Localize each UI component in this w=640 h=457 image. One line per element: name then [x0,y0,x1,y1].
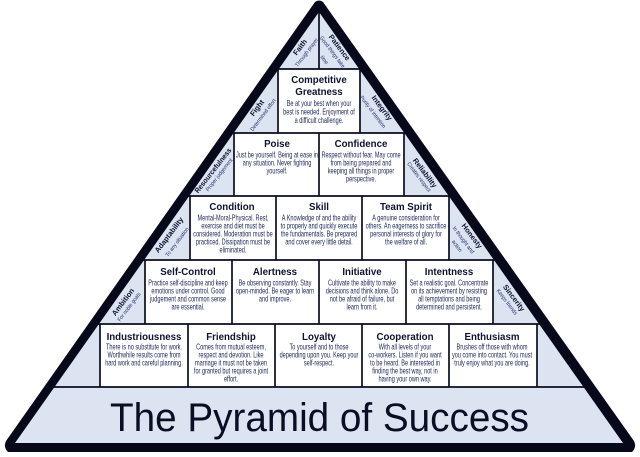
block: Team Spirit: the welfare of all. [385,239,427,247]
block grid lines [50,8,588,387]
block: Friendship: effort. [224,376,238,384]
block: Initiative: decisions and think alone. Do [326,288,399,296]
block: Poise: any situation. Never fighting [243,160,311,168]
block: Cooperation: With all levels of your [379,344,432,352]
block: Confidence: Confidence [335,139,388,150]
block: Condition: Condition [209,202,255,213]
block: Confidence [321,139,401,184]
block: Enthusiasm [452,332,532,368]
side block: Adaptability: Adaptability [153,215,186,254]
block: Cooperation: Cooperation [376,332,434,343]
side block: Resourcefulness: Proper judgement [205,157,235,193]
side block: Fight: Determined effort [249,98,278,133]
white block panels [100,69,537,387]
block: Competitive Greatness: Be at your best when your [287,100,352,108]
block: Loyalty: To yourself and to those [289,344,349,352]
side block: Ambition: Ambition [110,286,137,317]
block: Industriousness: hard work and careful planning. [105,360,183,368]
block: Loyalty: depending upon you. Keep your [280,352,359,360]
block: Intentness: determined and persistent. [416,304,482,312]
side block: Sincerity: Keeps friends [495,288,518,317]
block: Friendship: Comes from mutual esteem, [196,344,266,352]
side block: Fight: Fight [248,98,266,118]
block: Team Spirit: A genuine consideration for [372,215,440,223]
block: Competitive Greatness: best is needed. Enjoyment of [283,109,355,117]
side block: Honesty [450,222,485,255]
block: Team Spirit: Team Spirit [380,202,433,213]
side block: Patience: time [318,55,329,66]
block: Industriousness: Worthwhile results come from [107,352,181,360]
block: Condition: exercise and diet must be [201,223,265,231]
block: Competitive Greatness: a difficult challenge. [295,117,343,125]
side block: Sincerity: Sincerity [501,283,528,314]
block: Friendship: Friendship [206,332,256,343]
block: Initiative: not be afraid of failure, but [330,296,394,304]
block: Condition: considered. Moderation must be [193,231,273,239]
block: Skill [281,202,358,247]
side block: Ambition: For noble goals [117,291,143,323]
block: Poise: yourself. [266,168,288,176]
block: Cooperation: finding the best way, not in [372,368,438,376]
block: Intentness: on its achievement by resisting [411,288,487,296]
block: Intentness: Set a realistic goal. Concentrate [410,280,489,288]
block: Friendship: for granted but requires a joint [194,368,268,376]
side block: Adaptability: To any situation [165,226,191,258]
block: Self-Control: emotions under control. Good [151,288,225,296]
block: Condition: Mental-Moral-Physical. Rest, [197,215,269,223]
block: Cooperation: having your own way. [378,376,432,384]
side block: Integrity: Integrity [370,94,395,123]
block: Skill: Skill [309,202,329,213]
block: Intentness: all temptations and being [418,296,480,304]
block: Self-Control [148,267,228,312]
block: Team Spirit: others. An eagerness to sacrifice [366,223,447,231]
block: Poise: Just be yourself. Being at ease in [236,152,318,160]
block: Condition: practiced. Dissipation must be [196,239,270,247]
side block: Honesty: action [450,239,463,254]
block: Confidence: perspective. [346,176,376,184]
side block: Patience: Patience [327,33,352,62]
block: Cooperation: co-workers. Listen if you want [368,352,442,360]
block: Alertness: and improve. [259,296,291,304]
block: Skill: and cover every little detail. [285,239,353,247]
block: Skill: A Knowledge of and the ability [282,215,357,223]
block: Industriousness: Industriousness [107,332,181,343]
block: Condition: eliminated. [220,247,247,255]
block: Industriousness: There is no substitute for work. [106,344,182,352]
block: Confidence: from being prepared and [331,160,392,168]
block: Competitive Greatness: Competitive [291,75,347,86]
block: Alertness: open-minded. Be eager to learn [236,288,314,296]
block: Poise [236,139,318,176]
block: Skill: the fundamentals. Be prepared [281,231,357,239]
block: Alertness [236,267,314,304]
side block: Faith: Through prayer [294,37,320,68]
side block: Resourcefulness: Resourcefulness [193,147,234,195]
block: Loyalty: self-respect. [304,360,334,368]
block: Initiative: learn from it. [347,304,378,312]
block: Self-Control: Practice self-discipline and keep [148,280,228,288]
block: Self-Control: Self-Control [160,267,216,278]
block: Self-Control: are essential. [171,304,205,312]
block: Condition [193,202,273,255]
block: Friendship: respect and devotion. Like [199,352,264,360]
side block: Honesty: In thought and [451,226,475,255]
block: Self-Control: judgement and common sense [149,296,226,304]
block: Confidence: keeping all things in proper [328,168,395,176]
block: Initiative: Cultivate the ability to make [328,280,396,288]
block: Competitive Greatness [283,75,355,125]
block: Poise: Poise [264,139,291,150]
side block: Faith: Faith [291,37,309,57]
block: Enthusiasm: Enthusiasm [465,332,520,343]
block: Intentness: Intentness [425,267,473,278]
block: Enthusiasm: you come into contact. You must [452,352,532,360]
side block: Reliability: Creates respect [405,161,432,194]
block: Loyalty [280,332,359,368]
block: Competitive Greatness: Greatness [295,87,343,98]
block: Enthusiasm: Brushes off those with whom [457,344,528,352]
block: Alertness: Alertness [253,267,297,278]
block: Initiative [326,267,399,312]
block: Intentness [410,267,489,312]
block: Enthusiasm: truly enjoy what you are doing. [454,360,530,368]
block: Confidence: Respect without fear. May come [321,152,401,160]
block: Initiative: Initiative [342,267,382,278]
block: Cooperation: to be heard. Be interested in [370,360,440,368]
block: Industriousness [105,332,183,368]
block: Team Spirit: personal interests of glory for [370,231,442,239]
block: Friendship [194,332,268,384]
block: Team Spirit [366,202,447,247]
block: Loyalty: Loyalty [302,332,337,343]
block: Friendship: marriage it must not be taken [195,360,267,368]
title: The Pyramid of Success [110,396,529,440]
side block: Ambition [110,286,143,323]
side block: Honesty: Honesty [460,222,485,251]
block: Skill: to properly and quickly execute [281,223,358,231]
side block: Reliability: Reliability [411,156,440,190]
side block: Integrity: Purity of intention [358,95,387,130]
block: Alertness: Be observing constantly. Stay [239,280,312,288]
side block: Patience: Good things take [318,35,346,69]
block: Cooperation [368,332,442,384]
